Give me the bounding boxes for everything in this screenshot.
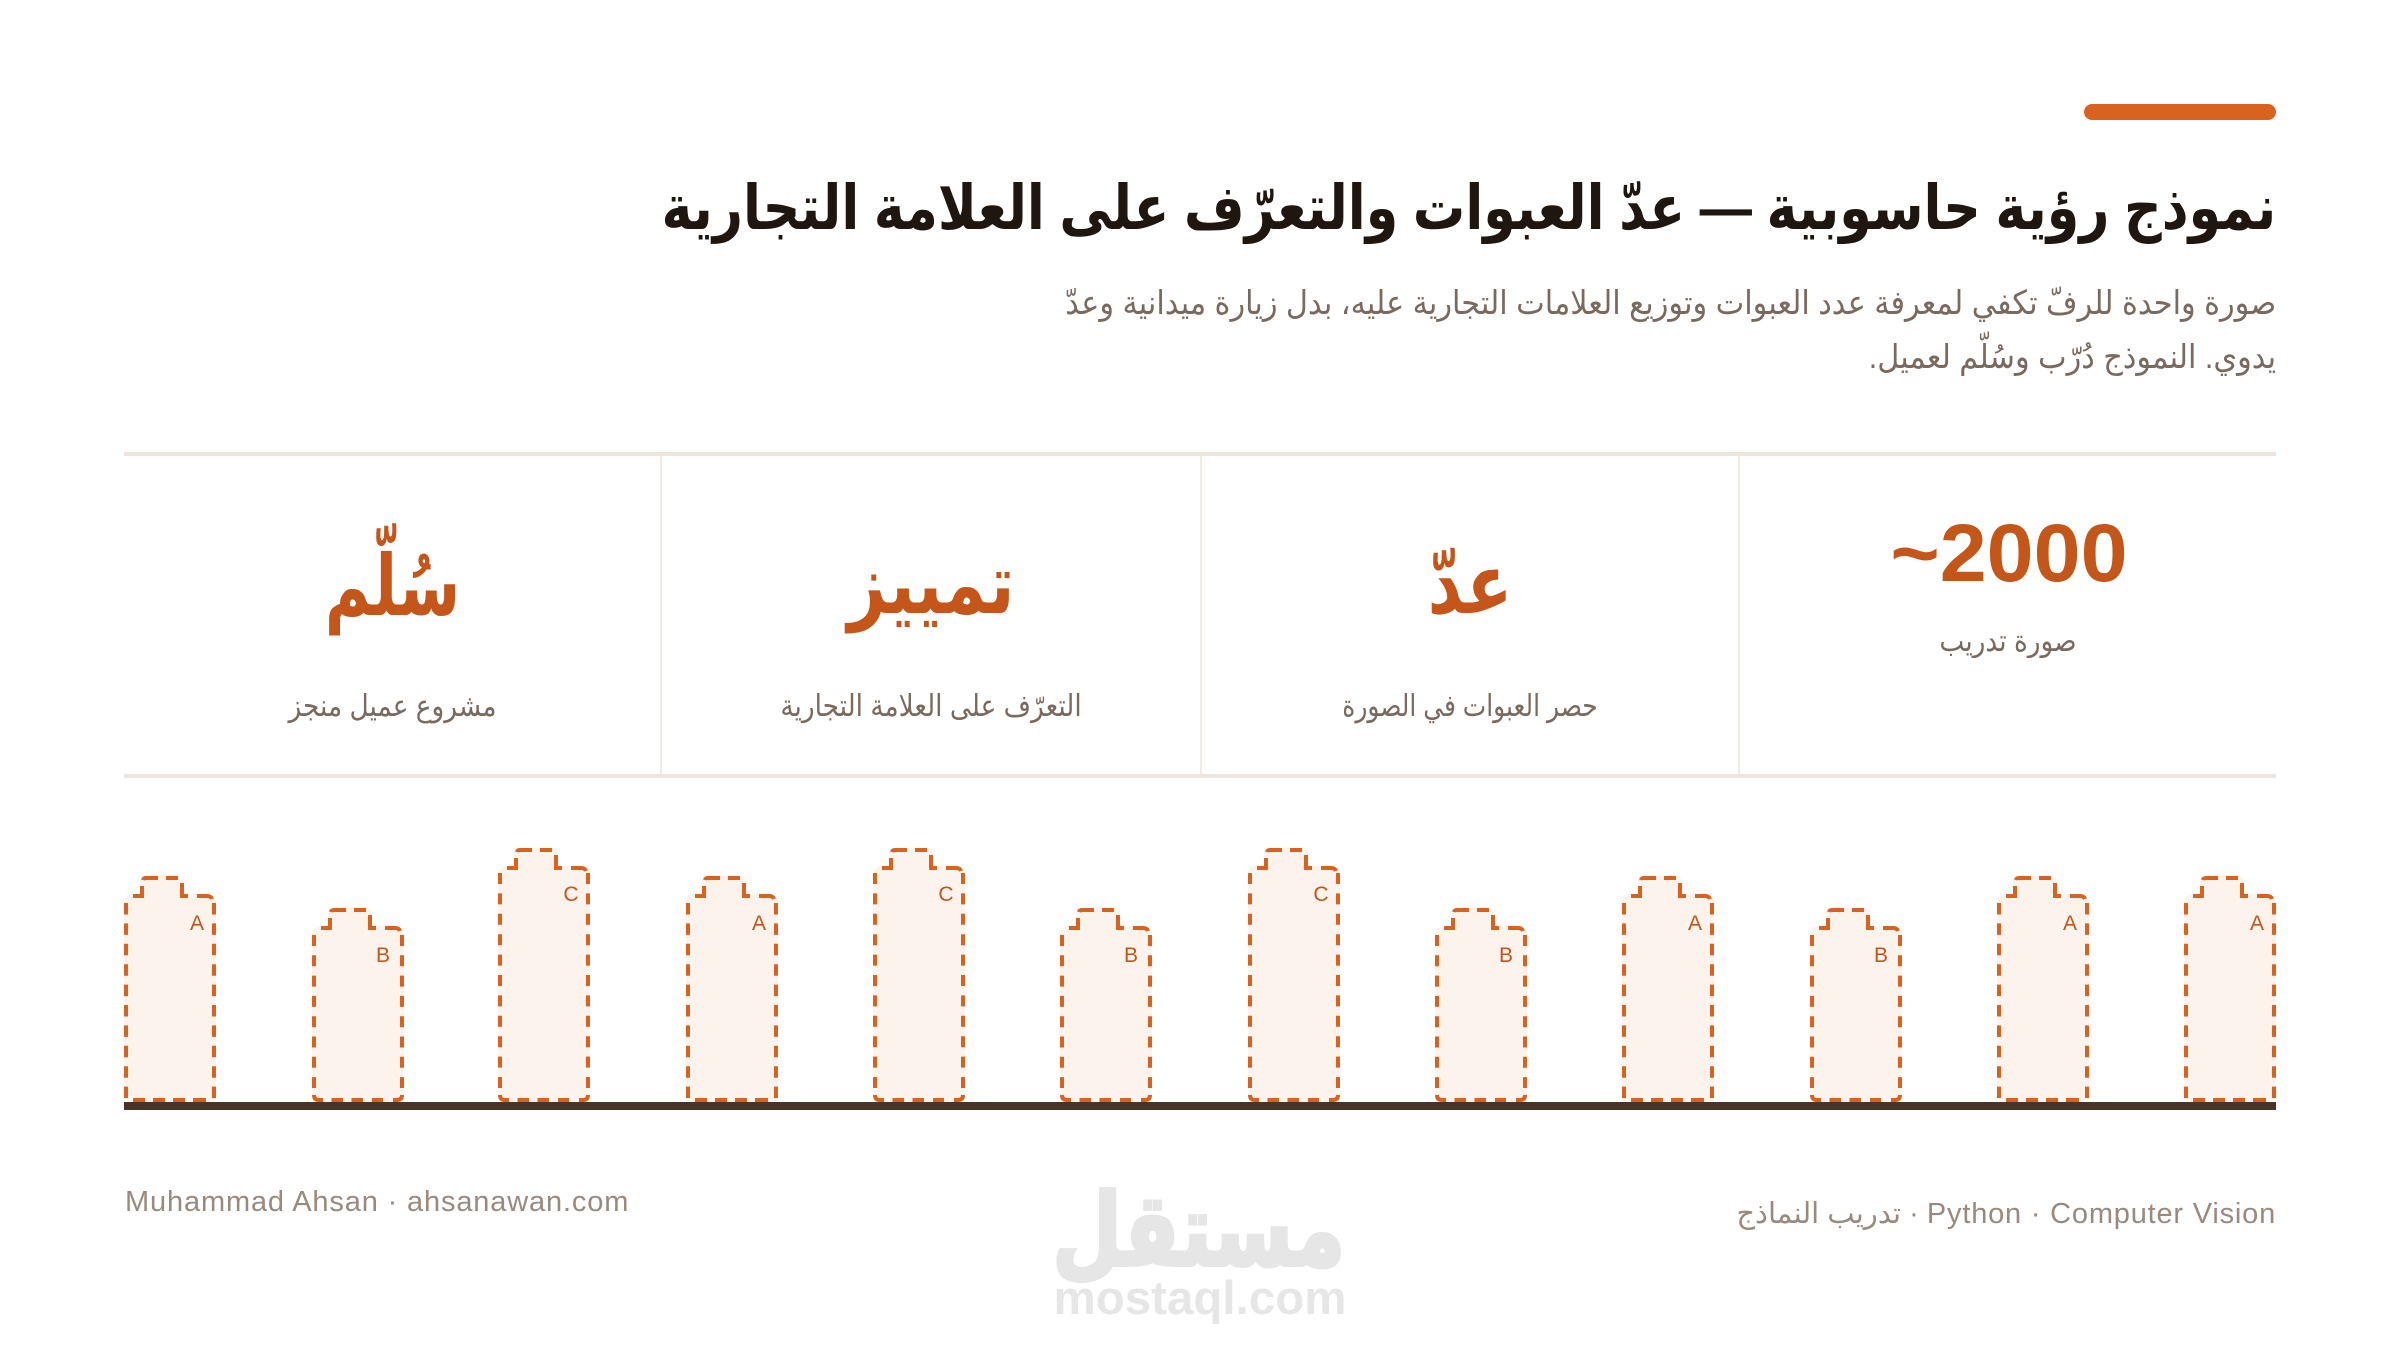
shelf line [124, 1102, 2276, 1110]
bottle C: C [1313, 883, 1329, 906]
divider [1738, 456, 1740, 774]
bottle B [312, 908, 404, 1102]
accent bar [2084, 104, 2276, 120]
bottle A: A [190, 912, 204, 935]
bottle B: B [376, 944, 390, 967]
bottle B [1810, 908, 1902, 1102]
subtitle [1065, 284, 2276, 376]
footer credit: Muhammad Ahsan · ahsanawan.com [125, 1186, 629, 1218]
bottle A: A [2063, 912, 2077, 935]
stat label: صورة تدريب [1939, 625, 2077, 658]
bottle A [1622, 876, 1714, 1102]
bottle C [498, 848, 590, 1102]
stats panel [124, 452, 2276, 778]
bottle C [1248, 848, 1340, 1102]
watermark latin: mostaql.com [1054, 1272, 1346, 1325]
subtitle: صورة واحدة للرفّ تكفي لمعرفة عدد العبوات وتوزيع العلامات التجارية عليه، بدل زيارة ميدانية وعدّ [1065, 284, 2276, 321]
stat value: سُلّم [325, 539, 460, 633]
stats top rule [124, 452, 2276, 456]
watermark logo [1052, 1175, 1346, 1325]
bottle row [124, 848, 2276, 1110]
footer tags: تدريب النماذج · Python · Computer Vision [1736, 1198, 2276, 1230]
bottle A [686, 876, 778, 1102]
watermark arabic: مستقل [1052, 1175, 1345, 1287]
stat label: التعرّف على العلامة التجارية [780, 690, 1082, 723]
bottle A: A [2250, 912, 2264, 935]
stat value: عدّ [1428, 537, 1512, 631]
bottle B: B [1874, 944, 1888, 967]
bottle B [1435, 908, 1527, 1102]
bottle C: C [938, 883, 954, 906]
bottle A: A [752, 912, 766, 935]
bottle B: B [1124, 944, 1138, 967]
bottle C: C [563, 883, 579, 906]
bottle A [2184, 876, 2276, 1102]
bottle C [873, 848, 965, 1102]
stat: counting [1342, 537, 1598, 724]
stats bottom rule [124, 774, 2276, 778]
stat: recognition [780, 537, 1082, 723]
divider [1200, 456, 1202, 774]
bottle A: A [1688, 912, 1702, 935]
stat: delivered [287, 523, 497, 724]
bottle A [1997, 876, 2089, 1102]
subtitle: يدوي. النموذج دُرّب وسُلّم لعميل. [1869, 338, 2276, 375]
title: نموذج رؤية حاسوبية — عدّ العبوات والتعرّف على العلامة التجارية [661, 174, 2276, 243]
stat label: مشروع عميل منجز [288, 690, 497, 723]
stat value: تمييز [848, 537, 1014, 631]
stat value: ~2000 [1890, 508, 2128, 599]
bottle A [124, 876, 216, 1102]
stat label: حصر العبوات في الصورة [1342, 690, 1598, 723]
divider [660, 456, 662, 774]
bottle B [1060, 908, 1152, 1102]
stat: training images [1890, 508, 2128, 658]
bottle B: B [1499, 944, 1513, 967]
